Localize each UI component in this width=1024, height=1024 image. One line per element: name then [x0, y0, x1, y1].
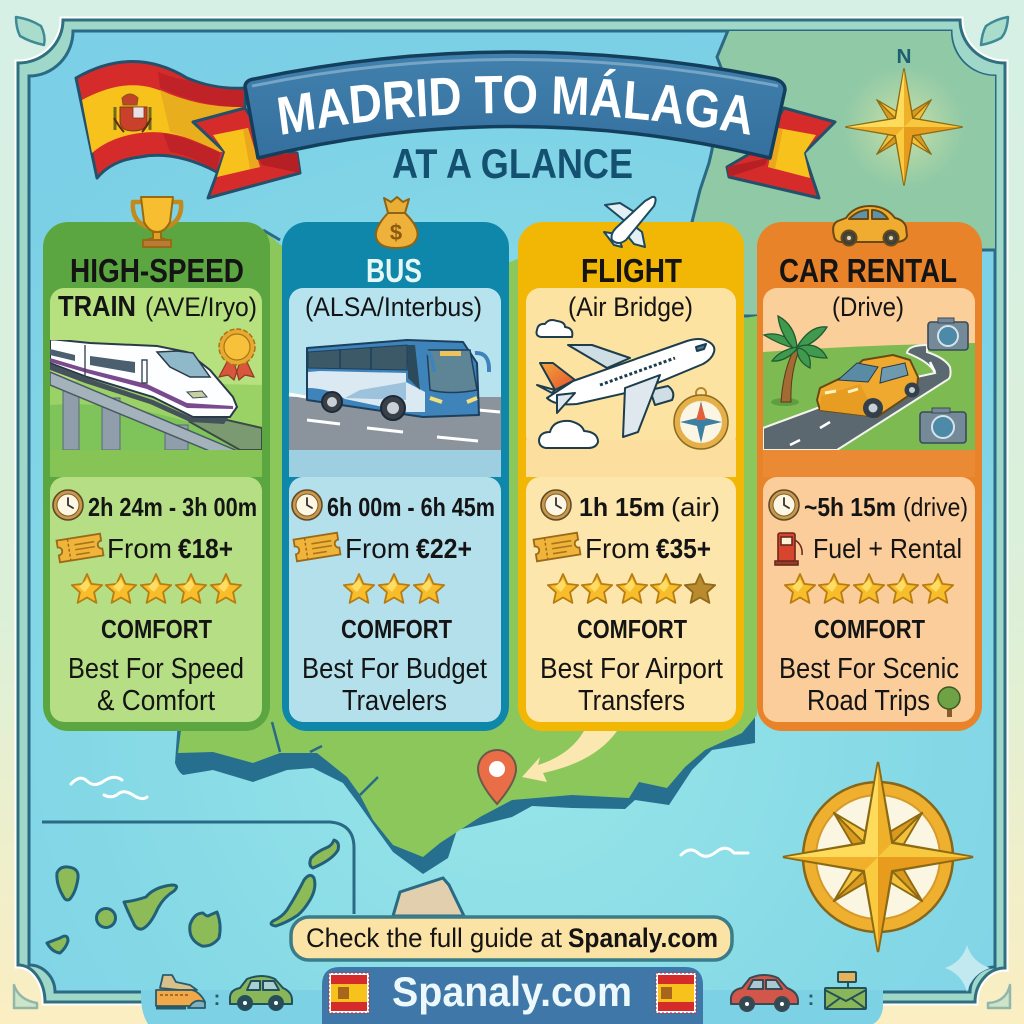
- stat: duration: [53, 490, 257, 522]
- callout: full guide: Check the full guide at: [306, 923, 562, 953]
- best for text: Travelers: [342, 685, 447, 717]
- best for text: Road Trips: [807, 685, 930, 717]
- stat: price: €35+: [656, 533, 711, 564]
- flag coat of arms: [114, 94, 151, 132]
- illustration: train on viaduct: [50, 339, 262, 452]
- subheading: bus companies: (ALSA/Interbus): [305, 292, 482, 322]
- icon: palm fronds: [764, 316, 827, 368]
- icon: money bag: $: [390, 220, 402, 245]
- subheading: train line: TRAIN: [58, 291, 136, 323]
- pin: Málaga: [478, 750, 516, 804]
- icon: small yellow car: [833, 206, 907, 246]
- land: north Africa: [393, 878, 464, 916]
- bottom tab: [141, 990, 883, 1024]
- stat: price: €22+: [416, 533, 472, 564]
- compass rose: large: [784, 763, 972, 951]
- best for text: Best For Speed: [68, 653, 244, 685]
- best for text: Best For Budget: [302, 653, 487, 685]
- panel: flight: [518, 222, 744, 731]
- sparkle: [945, 945, 990, 992]
- heading: flight: FLIGHT: [581, 252, 682, 289]
- icon: green car: [230, 976, 292, 1010]
- rating: five stars: [72, 574, 241, 603]
- stat: price: From: [345, 533, 410, 564]
- icon: red car: [731, 975, 798, 1011]
- land: northern green region: [692, 28, 1000, 316]
- heading: high-speed train: HIGH-SPEED: [70, 252, 244, 289]
- icon: tree: [938, 687, 960, 717]
- stat: price: From: [585, 533, 650, 564]
- illustration: coach bus on road: [289, 340, 501, 450]
- land: mainland: [178, 230, 757, 857]
- stat: price: [534, 533, 711, 564]
- icon: fuel pump: [775, 533, 802, 565]
- subheading: air bridge: (Air Bridge): [568, 292, 693, 322]
- title: MADRID TO MÁLAGA: [278, 68, 750, 135]
- icon: compass: [674, 388, 728, 449]
- stat: fuel and rental: Fuel + Rental: [813, 533, 962, 564]
- icon: small plane: [604, 197, 656, 247]
- stat: duration: 6h 00m - 6h 45m: [327, 492, 495, 522]
- icon: camera top: [928, 318, 968, 350]
- coast shadow: [175, 715, 755, 874]
- flag stamp right: [656, 973, 696, 1013]
- stat: duration: 2h 24m - 3h 00m: [88, 492, 257, 522]
- arrow to Málaga: [522, 731, 617, 782]
- best for text: Best For Airport: [540, 653, 723, 685]
- stat: duration: [541, 490, 720, 522]
- Canary Islands: [47, 840, 338, 953]
- rating: three stars: [344, 574, 444, 603]
- flag stamp left: [329, 973, 369, 1013]
- compass rose: north: [842, 46, 966, 189]
- icon: envelope: [825, 972, 866, 1009]
- stat: price: [57, 533, 233, 564]
- label: comfort: COMFORT: [101, 614, 212, 644]
- stat: duration: 1h 15m: [579, 492, 665, 522]
- stat: price: From: [107, 533, 172, 564]
- illustration: airplane with clouds: [536, 320, 714, 448]
- title ribbon: [243, 50, 787, 160]
- stat: duration: (air): [671, 492, 720, 522]
- rating: five stars: [785, 574, 953, 603]
- stat: price: [294, 533, 472, 564]
- subheading: drive: (Drive): [832, 292, 904, 322]
- banner: Spanaly.com: [322, 967, 703, 1024]
- stat: duration: (drive): [903, 492, 968, 522]
- flag tail: left: [193, 108, 300, 198]
- flag tail: right: [727, 108, 835, 198]
- icon: money bag: [376, 197, 418, 248]
- icon: ferry: [156, 975, 205, 1008]
- panel: car rental: [757, 222, 982, 731]
- Canary Islands inset line: [42, 822, 354, 914]
- callout: full guide: Spanaly.com: [568, 923, 718, 953]
- subheading: train line: (AVE/Iryo): [145, 292, 257, 322]
- best for text: Transfers: [578, 685, 685, 717]
- icon: camera bottom: [920, 408, 966, 443]
- stat: duration: ~5h 15m: [804, 492, 896, 522]
- stat: duration: [769, 490, 968, 522]
- waves: [71, 777, 748, 856]
- label: comfort: COMFORT: [814, 614, 925, 644]
- separator: :: [214, 988, 220, 1010]
- callout: full guide: [291, 917, 732, 960]
- heading: car rental: CAR RENTAL: [779, 252, 957, 289]
- stat: price: €18+: [178, 533, 233, 564]
- icon: medal: [219, 329, 255, 380]
- map: land and coast: [175, 28, 1000, 916]
- brand text: Spanaly.com: [392, 968, 632, 1015]
- panel: high-speed train: [43, 222, 270, 731]
- stat: duration: [292, 490, 495, 522]
- label: comfort: COMFORT: [341, 614, 452, 644]
- rating: four and a half stars: [548, 574, 715, 603]
- best for text: & Comfort: [97, 685, 215, 717]
- panel: bus: [282, 222, 509, 731]
- icon: trophy: [133, 197, 181, 247]
- flag: waving Spanish flag: [76, 62, 245, 178]
- illustration: road, palm and car: [763, 343, 975, 450]
- best for text: Best For Scenic: [779, 653, 959, 685]
- subtitle: AT A GLANCE: [392, 140, 633, 187]
- label: comfort: COMFORT: [577, 614, 687, 644]
- heading: bus: BUS: [366, 252, 422, 289]
- compass rose: north: N: [896, 46, 912, 68]
- separator: :: [808, 988, 814, 1010]
